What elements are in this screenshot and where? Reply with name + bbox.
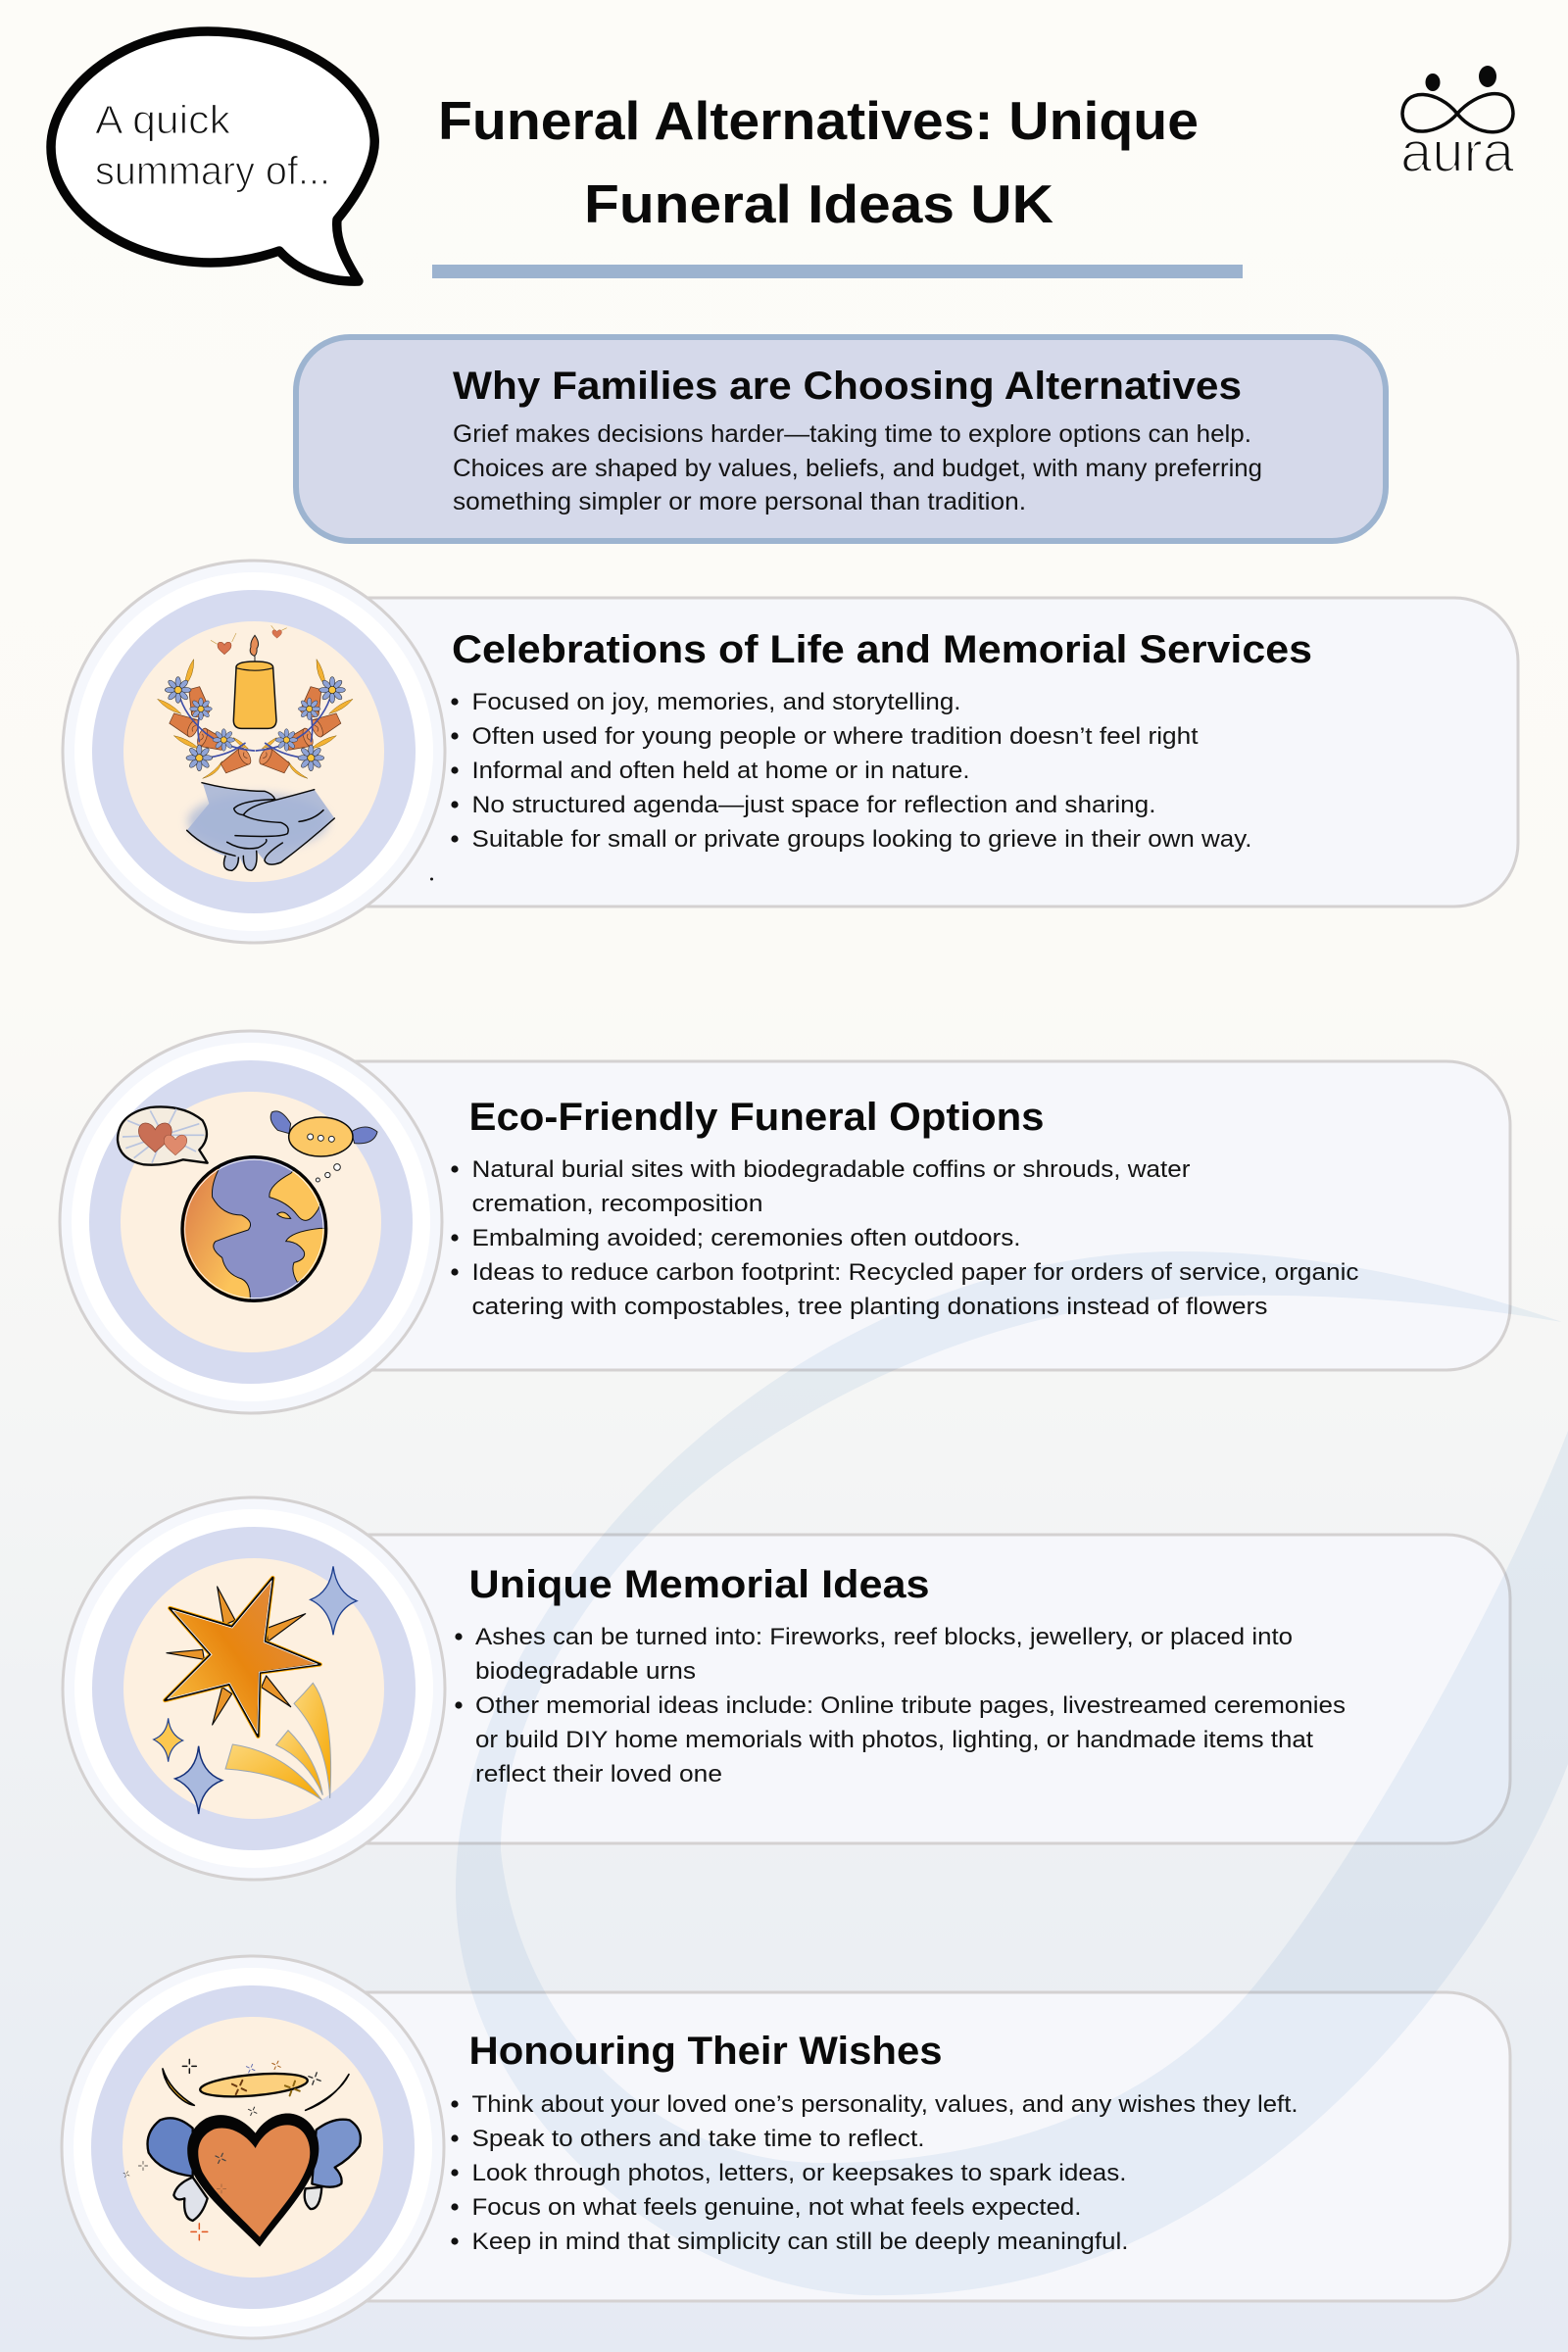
text block: why families body <box>453 420 1262 515</box>
bullet list: unique memorial: or build DIY home memorials with photos, lighting, or handmade items that <box>475 1727 1313 1753</box>
background swoosh <box>456 1251 1568 2295</box>
title underline bar <box>432 265 1243 278</box>
text block: why families body: Choices are shaped by values, beliefs, and budget, with many preferring <box>453 455 1262 482</box>
text block: why families body: Grief makes decisions harder—taking time to explore options can help. <box>453 420 1251 448</box>
heading: celebrations: Celebrations of Life and Memorial Services <box>452 628 1312 671</box>
bullet list: unique memorial: reflect their loved one <box>475 1761 722 1788</box>
icon: candle, wreath and hands <box>63 561 445 943</box>
logo: aura: aura <box>1400 121 1515 184</box>
panel: eco-friendly funeral options <box>60 1031 1510 1413</box>
bullet list: unique memorial: biodegradable urns <box>475 1658 696 1685</box>
heading: unique memorial: Unique Memorial Ideas <box>468 1563 929 1606</box>
bullet list: eco-friendly: Embalming avoided; ceremonies often outdoors. <box>472 1225 1021 1251</box>
icon: fireworks star and sparkles <box>63 1497 445 1880</box>
panel: unique memorial ideas <box>63 1497 1510 1880</box>
bullet list: honouring wishes <box>451 2091 1298 2255</box>
bullet list: celebrations: Focused on joy, memories, and storytelling. <box>472 689 960 715</box>
panel: why families are choosing alternatives <box>296 337 1386 541</box>
bullet list: unique memorial: Other memorial ideas include: Online tribute pages, livestreamed ceremonies <box>475 1692 1346 1719</box>
heading: why families: Why Families are Choosing Alternatives <box>453 365 1242 408</box>
bullet list: celebrations: No structured agenda—just space for reflection and sharing. <box>472 792 1156 818</box>
bullet list: celebrations: Often used for young people or where tradition doesn’t feel right <box>472 723 1199 750</box>
bullet list: honouring wishes: Focus on what feels genuine, not what feels expected. <box>472 2194 1082 2221</box>
bullet list: eco-friendly: catering with compostables, tree planting donations instead of flowers <box>472 1294 1268 1320</box>
panel: celebrations of life <box>63 561 1518 943</box>
bullet list: eco-friendly <box>451 1156 1358 1320</box>
title <box>438 90 1199 234</box>
bullet list: honouring wishes: Speak to others and take time to reflect. <box>472 2126 925 2152</box>
speech bubble: A quick summary of...: summary of... <box>95 148 330 193</box>
bullet list: honouring wishes: Keep in mind that simplicity can still be deeply meaningful. <box>472 2229 1129 2255</box>
bullet list: eco-friendly: Natural burial sites with biodegradable coffins or shrouds, water <box>472 1156 1190 1183</box>
bullet list: unique memorial: Ashes can be turned into: Fireworks, reef blocks, jewellery, or placed into <box>475 1624 1293 1650</box>
bullet list: eco-friendly: cremation, recomposition <box>472 1191 762 1217</box>
bullet list: unique memorial <box>455 1624 1346 1788</box>
panel: honouring their wishes <box>62 1956 1510 2338</box>
bullet list: honouring wishes: Look through photos, letters, or keepsakes to spark ideas. <box>472 2160 1127 2186</box>
bullet list: celebrations: Suitable for small or private groups looking to grieve in their own way. <box>472 826 1252 853</box>
speech bubble: A quick summary of...: A quick <box>95 97 231 142</box>
icon: globe with speech bubbles <box>60 1031 442 1413</box>
title: Funeral Ideas UK <box>584 173 1054 234</box>
heading: honouring wishes: Honouring Their Wishes <box>468 2030 943 2073</box>
bullet list: celebrations: Informal and often held at home or in nature. <box>472 758 970 784</box>
logo: aura <box>1400 66 1515 184</box>
title: Funeral Alternatives: Unique <box>438 90 1199 151</box>
text block: why families body: something simpler or more personal than tradition. <box>453 488 1026 515</box>
icon: winged heart with halo <box>62 1956 444 2338</box>
heading: eco-friendly: Eco-Friendly Funeral Options <box>468 1096 1045 1139</box>
bullet list: celebrations <box>430 689 1252 880</box>
speech bubble: A quick summary of... <box>51 31 374 281</box>
bullet list: eco-friendly: Ideas to reduce carbon footprint: Recycled paper for orders of service, organic <box>472 1259 1358 1286</box>
bullet list: honouring wishes: Think about your loved one’s personality, values, and any wishes they left. <box>472 2091 1298 2118</box>
